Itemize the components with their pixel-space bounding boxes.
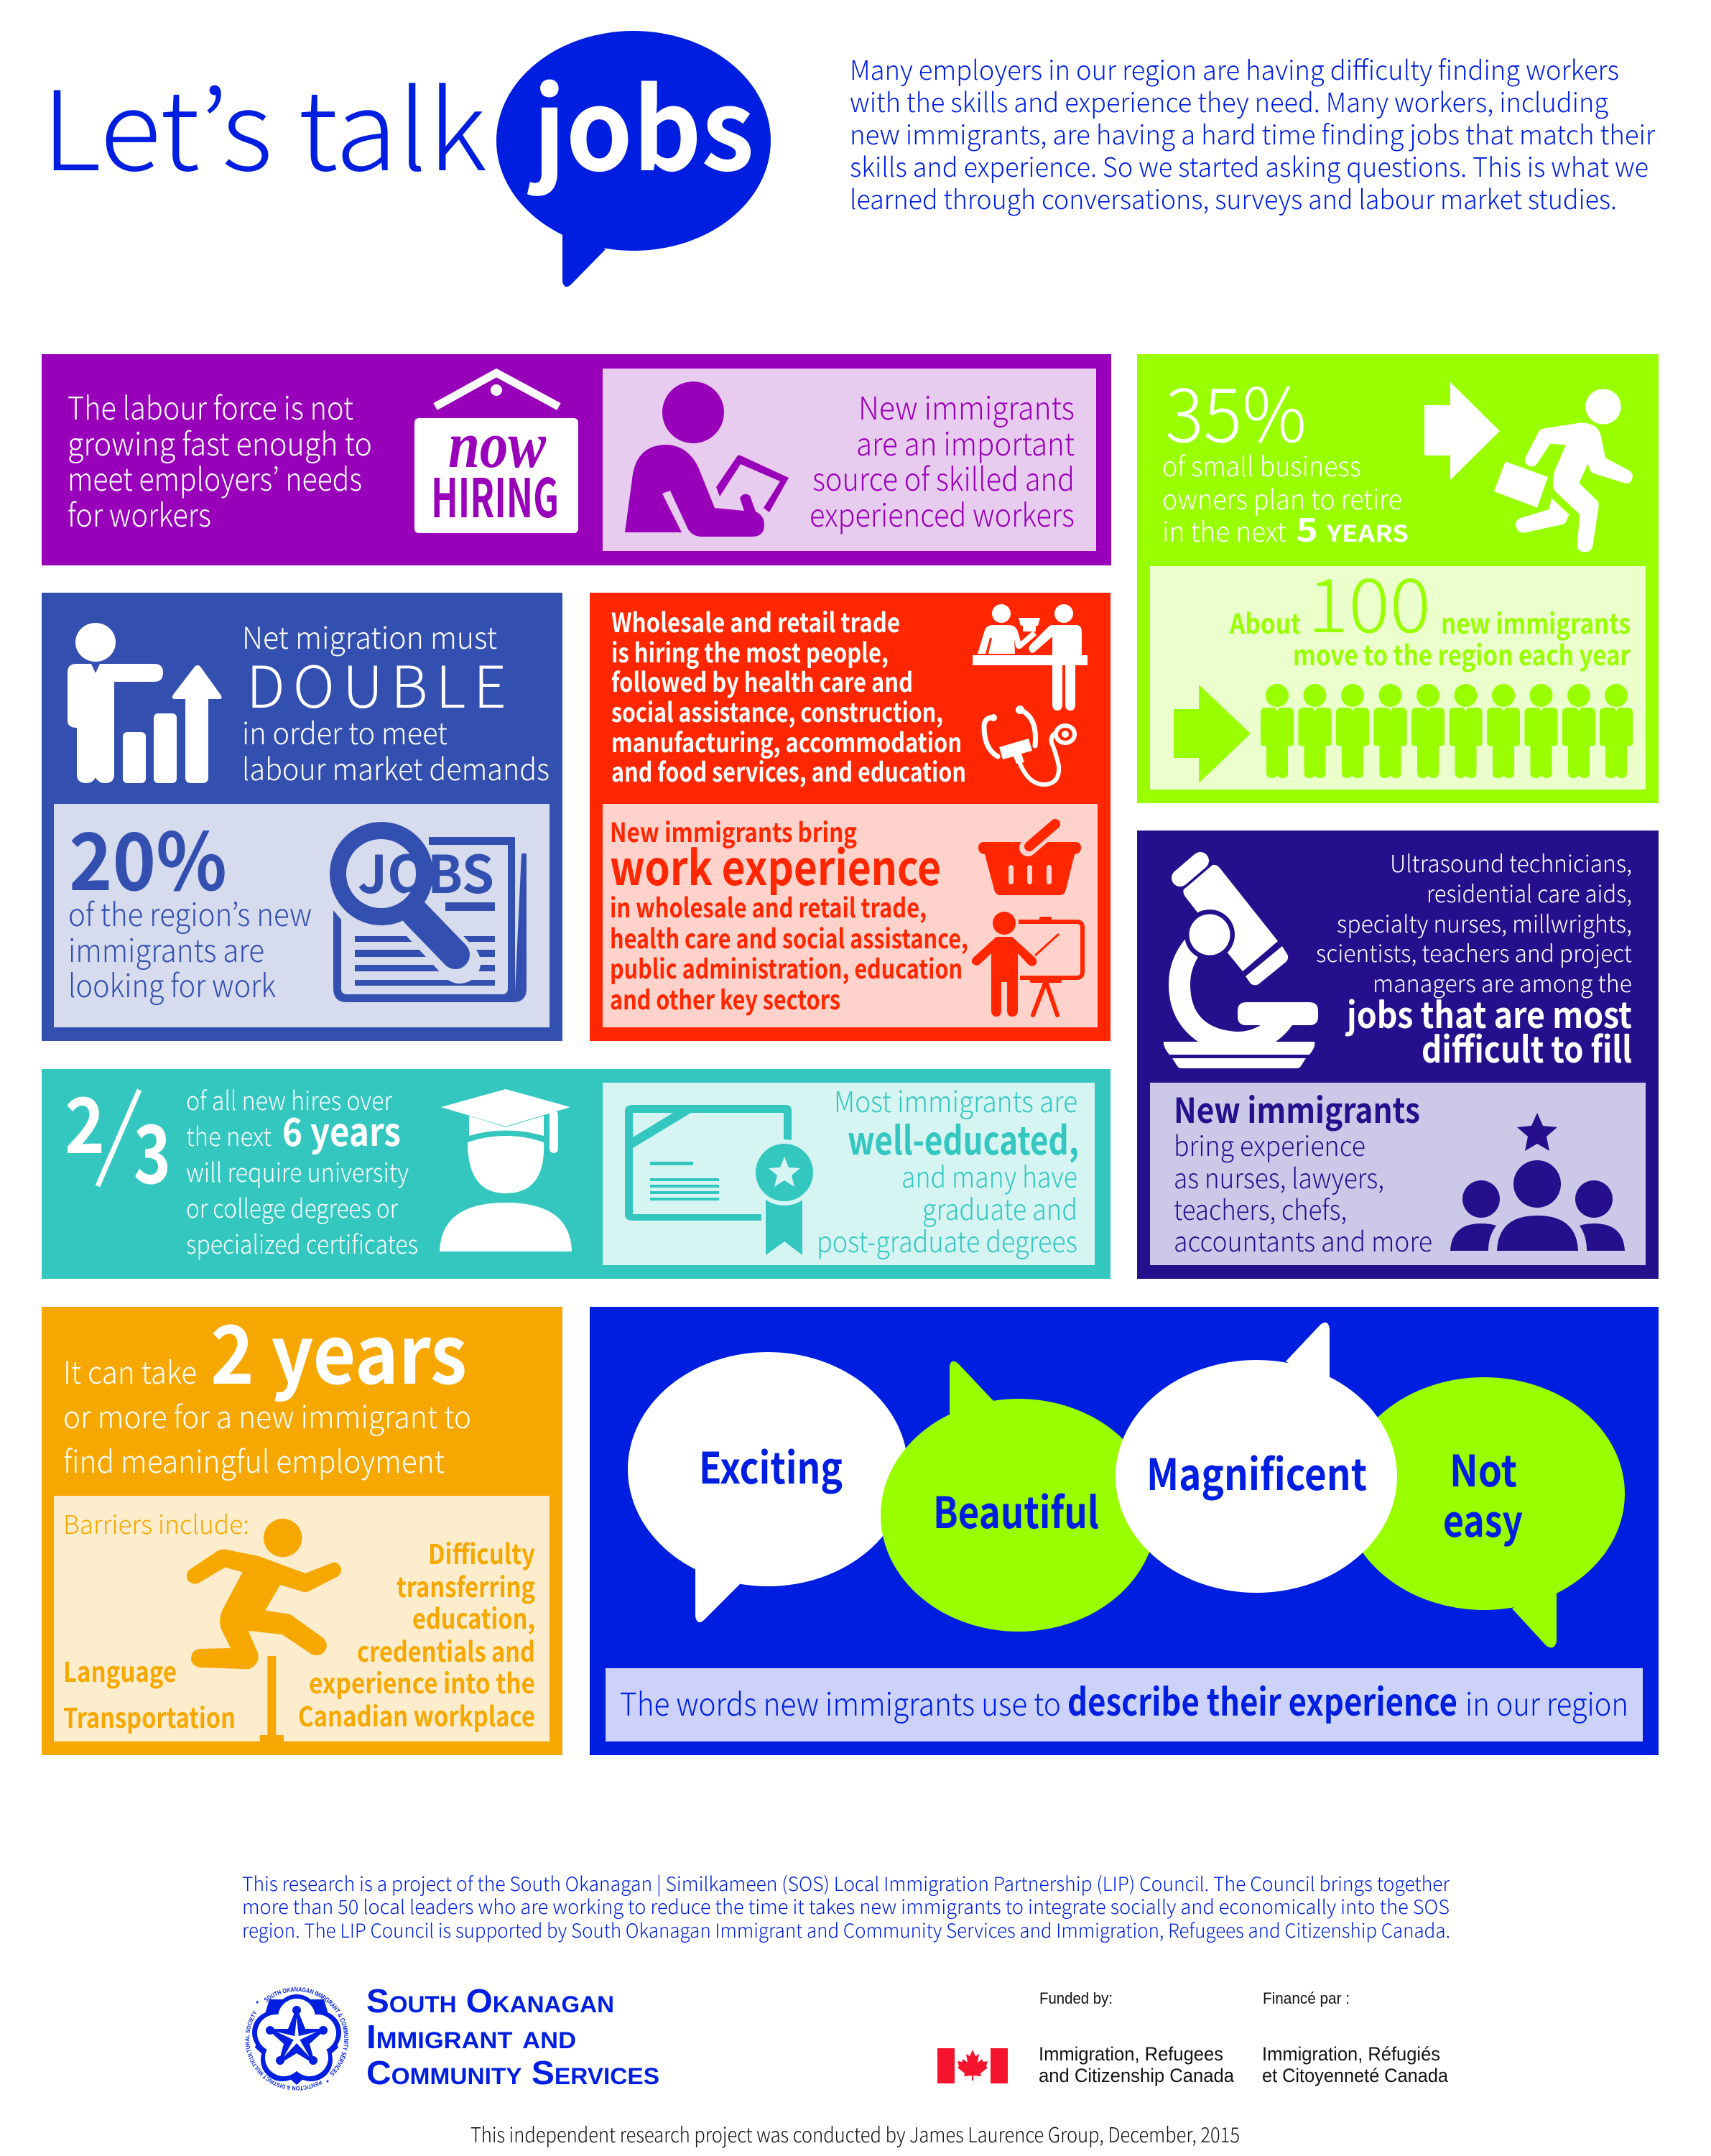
- hard-to-fill text: scientists, teachers and project: [1316, 935, 1632, 969]
- title: [42, 31, 771, 287]
- new hires text: will require university: [186, 1152, 409, 1190]
- footer paragraph: more than 50 local leaders who are working to reduce the time it takes new immigrants to integrate socially and economically into the SOS: [242, 1892, 1450, 1920]
- time to find work text: [63, 1291, 471, 1482]
- sub-panel: newcomer professions: [1150, 1083, 1646, 1265]
- icon: teacher at board: [972, 912, 1082, 1017]
- title text: jobs: jobs: [527, 40, 754, 203]
- looking for work text: immigrants are: [68, 925, 264, 971]
- panel: net migration: [42, 593, 562, 1041]
- well-educated text: post-graduate degrees: [817, 1219, 1077, 1261]
- icon: now hiring sign: HIRING: [431, 456, 559, 533]
- net migration text: Net migration must: [242, 614, 497, 658]
- barriers list: Canadian workplace: [298, 1695, 535, 1734]
- retire text: [1162, 445, 1409, 552]
- hiring sectors text: and food services, and education: [611, 751, 966, 790]
- title text: Let's talk: Let’s talk: [42, 44, 487, 203]
- speech bubble: Exciting: [628, 1352, 908, 1622]
- speech bubble: Magnificent: Magnificent: [1146, 1440, 1367, 1503]
- footer paragraph: [242, 1869, 1450, 1943]
- caption band: describe their experience: [1067, 1672, 1457, 1726]
- labour force text: [68, 383, 372, 536]
- hard-to-fill text: residential care aids,: [1427, 875, 1632, 910]
- looking for work text: [68, 889, 312, 1007]
- barriers list: credentials and: [357, 1630, 535, 1670]
- department names: Immigration, Réfugiés: [1262, 2043, 1440, 2065]
- stat: two thirds: [65, 1064, 171, 1207]
- department names: et Citoyenneté Canada: [1262, 2065, 1449, 2086]
- professions text: New immigrants: [1174, 1083, 1420, 1133]
- barriers heading: Barriers include:: [63, 1504, 249, 1542]
- caption band: [606, 1668, 1643, 1741]
- net migration text: [242, 614, 550, 790]
- professions text: accountants and more: [1174, 1220, 1432, 1259]
- credit line: This independent research project was conducted by James Laurence Group, December, 2015: [470, 2119, 1240, 2149]
- caption band: in our region: [1465, 1679, 1628, 1725]
- retire text: owners plan to retire: [1162, 478, 1402, 517]
- new hires text: specialized certificates: [186, 1224, 418, 1262]
- sub-panel: 100 newcomers: [1150, 545, 1646, 790]
- footer paragraph: This research is a project of the South Okanagan | Similkameen (SOS) Local Immigration Partnership (LIP) Council. The Council brings together: [242, 1869, 1450, 1897]
- hard-to-fill text: Ultrasound technicians,: [1390, 845, 1632, 879]
- newcomers text: move to the region each year: [1293, 634, 1631, 673]
- well-educated text: well-educated,: [848, 1109, 1079, 1166]
- logo wordmark: South Okanagan: [366, 1982, 614, 2019]
- logo wordmark: Community Services: [366, 2054, 659, 2091]
- panel: hard-to-fill jobs: [1137, 831, 1659, 1279]
- stat: two thirds: 3: [134, 1091, 171, 1207]
- funded by labels: [1039, 1989, 1350, 2007]
- icon: newspaper and magnifier: [330, 822, 527, 1002]
- stat: 20%: 20%: [69, 798, 227, 913]
- well-educated text: graduate and: [922, 1187, 1077, 1229]
- labour force text: growing fast enough to: [68, 419, 372, 465]
- icon: now hiring sign: now: [448, 408, 547, 481]
- icon: runner jumping a hurdle: [187, 1519, 341, 1742]
- panel: credentials: [42, 1064, 1110, 1279]
- icon: person with tablet: [625, 381, 789, 537]
- newcomers text: 100: [1307, 545, 1431, 654]
- new hires text: of all new hires over: [186, 1081, 393, 1118]
- stat: two thirds: 2: [65, 1064, 105, 1175]
- footer paragraph: region. The LIP Council is supported by South Okanagan Immigrant and Community Services and Immigration, Refugees and Citizenship Canada.: [242, 1915, 1450, 1943]
- sub-panel: 20 percent looking for work: [54, 798, 550, 1027]
- professions text: [1174, 1083, 1432, 1259]
- professions text: as nurses, lawyers,: [1174, 1157, 1384, 1196]
- sub-panel: skilled workers: [603, 369, 1096, 551]
- barriers list: Transportation: [63, 1696, 236, 1736]
- retire text: 5 years: [1296, 504, 1409, 552]
- time to find work text: find meaningful employment: [63, 1438, 445, 1482]
- work experience text: [610, 811, 968, 1017]
- hiring sectors text: [611, 601, 966, 790]
- retire text: of small business: [1162, 445, 1361, 484]
- intro paragraph: new immigrants, are having a hard time finding jobs that match their: [850, 114, 1656, 152]
- speech bubble: Not easy: easy: [1443, 1487, 1523, 1550]
- net migration text: DOUBLE: [246, 642, 506, 725]
- newcomers text: new immigrants: [1441, 602, 1631, 642]
- speech bubble: Magnificent: [1116, 1323, 1397, 1593]
- well-educated text: Most immigrants are: [834, 1079, 1077, 1121]
- skilled workers text: are an important: [856, 419, 1075, 465]
- time to find work text: It can take: [63, 1348, 197, 1393]
- new hires text: the next: [186, 1116, 272, 1154]
- sub-panel: barriers: [54, 1496, 550, 1742]
- department names: and Citizenship Canada: [1039, 2065, 1235, 2086]
- barriers list: Difficulty: [428, 1532, 535, 1572]
- logo emblem: SOUTH OKANAGAN IMMIGRANT & COMMUNITY SERVICES: [264, 1987, 349, 2076]
- speech bubble: Not easy: [1343, 1377, 1625, 1648]
- hiring sectors text: social assistance, construction,: [611, 691, 943, 730]
- panel: hiring sectors: [590, 593, 1110, 1041]
- skilled workers text: [810, 383, 1075, 536]
- well-educated text: and many have: [901, 1155, 1077, 1196]
- stat: 35%: 35%: [1165, 355, 1307, 463]
- new hires text: 6 years: [282, 1101, 401, 1157]
- time to find work text: 2 years: [210, 1291, 467, 1407]
- intro paragraph: with the skills and experience they need. Many workers, including: [850, 81, 1608, 120]
- panel: time to find work: [42, 1291, 562, 1755]
- newcomers text: About: [1229, 602, 1301, 642]
- icon: man pointing at rising chart: [68, 623, 222, 783]
- barriers list: Language: [63, 1650, 177, 1690]
- icon: microscope: [1164, 861, 1318, 1068]
- professions text: teachers, chefs,: [1174, 1188, 1347, 1228]
- sub-panel: well-educated: [603, 1079, 1095, 1265]
- icon: running man with briefcase: [1494, 389, 1633, 552]
- icon: stethoscope: [984, 705, 1075, 785]
- hiring sectors text: manufacturing, accommodation: [611, 721, 962, 760]
- time to find work text: or more for a new immigrant to: [63, 1393, 471, 1438]
- logo wordmark: Immigrant and: [366, 2018, 576, 2055]
- icon: newspaper and magnifier: JOBS: [358, 833, 494, 908]
- hard-to-fill text: specialty nurses, millwrights,: [1337, 905, 1632, 940]
- looking for work text: looking for work: [68, 961, 276, 1007]
- panel: words describing the experience: [590, 1307, 1659, 1755]
- work experience text: in wholesale and retail trade,: [610, 887, 927, 925]
- icon: graduate: [440, 1089, 572, 1252]
- newcomers text: [1229, 545, 1631, 673]
- speech bubble: Beautiful: [881, 1361, 1156, 1632]
- intro paragraph: [850, 49, 1656, 217]
- icon: certificate: [625, 1105, 817, 1255]
- speech bubble: Not easy: Not: [1450, 1437, 1517, 1499]
- barriers list: experience into the: [309, 1662, 535, 1701]
- net migration text: labour market demands: [242, 746, 550, 790]
- labour force text: The labour force is not: [68, 383, 353, 429]
- work experience text: work experience: [610, 831, 941, 899]
- panel: labour force: [42, 354, 1111, 565]
- department names: [1039, 2043, 1449, 2086]
- department names: Immigration, Refugees: [1039, 2043, 1223, 2065]
- hard-to-fill text: [1316, 845, 1632, 1073]
- funded by labels: Financé par :: [1263, 1989, 1350, 2007]
- hard-to-fill text: difficult to fill: [1422, 1022, 1632, 1073]
- arrow: [1174, 685, 1251, 783]
- new hires text: or college degrees or: [186, 1188, 399, 1226]
- skilled workers text: experienced workers: [810, 490, 1075, 536]
- panel: retiring owners and newcomers: [1137, 354, 1659, 803]
- speech bubble: [496, 31, 771, 287]
- skilled workers text: New immigrants: [858, 383, 1075, 429]
- work experience text: public administration, education: [610, 948, 963, 986]
- retire text: in the next: [1162, 510, 1286, 550]
- speech bubble: Exciting: Exciting: [699, 1434, 843, 1496]
- work experience text: New immigrants bring: [610, 811, 857, 850]
- intro paragraph: learned through conversations, surveys and labour market studies.: [850, 178, 1617, 217]
- work experience text: health care and social assistance,: [610, 917, 968, 956]
- sub-panel: work experience: [603, 804, 1098, 1027]
- work experience text: and other key sectors: [610, 978, 840, 1017]
- icon: star above three people: [1450, 1113, 1625, 1251]
- net migration text: in order to meet: [242, 710, 448, 754]
- intro paragraph: skills and experience. So we started asking questions. This is what we: [850, 146, 1649, 185]
- caption band: The words new immigrants use to: [620, 1679, 1061, 1725]
- logo: South Okanagan Immigrant and Community Services: [245, 1982, 659, 2091]
- arrow: [1424, 382, 1500, 480]
- funded by labels: Funded by:: [1039, 1989, 1113, 2007]
- labour force text: for workers: [68, 490, 211, 536]
- professions text: bring experience: [1174, 1124, 1365, 1164]
- funders: [937, 1989, 1449, 2086]
- logo wordmark: [366, 1982, 659, 2091]
- icon: now hiring sign: [414, 373, 578, 533]
- labour force text: meet employers’ needs: [68, 454, 362, 500]
- hard-to-fill text: jobs that are most: [1345, 987, 1632, 1039]
- new hires text: [186, 1081, 418, 1262]
- intro paragraph: Many employers in our region are having difficulty finding workers: [850, 49, 1619, 88]
- well-educated text: [817, 1079, 1079, 1261]
- hiring sectors text: followed by health care and: [611, 661, 913, 700]
- icon: two people at a counter: [973, 604, 1088, 711]
- skilled workers text: source of skilled and: [812, 454, 1075, 500]
- hard-to-fill text: managers are among the: [1373, 965, 1632, 999]
- icon row: ten people: [1261, 684, 1633, 778]
- speech bubble: Beautiful: Beautiful: [933, 1479, 1099, 1541]
- barriers list: transferring: [397, 1565, 535, 1605]
- hiring sectors text: is hiring the most people,: [611, 631, 889, 670]
- hiring sectors text: Wholesale and retail trade: [611, 601, 900, 640]
- logo emblem: PENTICTON & DISTRICT MULTICULTURAL SOCIETY: [245, 2010, 322, 2091]
- barriers list: education,: [412, 1597, 535, 1637]
- looking for work text: of the region’s new: [68, 889, 312, 935]
- icon: shopping basket: [978, 824, 1081, 895]
- barriers list: [63, 1532, 535, 1736]
- icon: Canadian flag: [937, 2048, 1008, 2083]
